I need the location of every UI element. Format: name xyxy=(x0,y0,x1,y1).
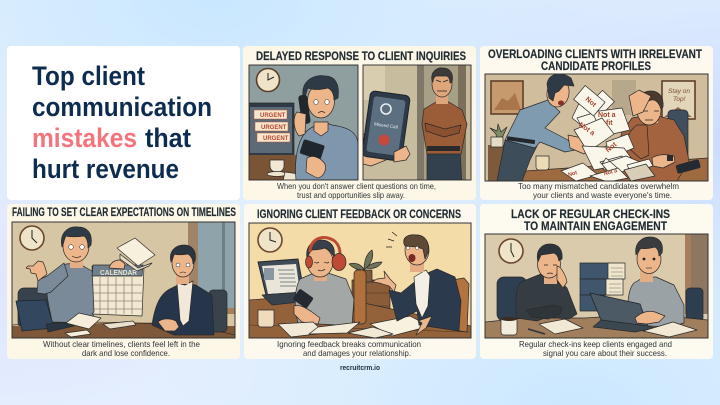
illustration: overwhelmed employee with urgent messages: URGENT xyxy=(261,125,287,131)
illustration: disengaged client and busy consultant xyxy=(485,234,708,338)
illustration: pile of not-a-fit resumes: fit xyxy=(606,120,613,127)
panel: ignoring feedback xyxy=(244,204,476,359)
title: mistakes xyxy=(32,123,137,153)
illustration: overwhelmed employee with urgent messages: URGENT xyxy=(263,136,289,142)
title: Top client xyxy=(32,61,145,91)
caption: signal you care about their success. xyxy=(543,348,667,358)
caption xyxy=(518,181,679,200)
illustration: employee with headphones ignoring client xyxy=(249,223,471,338)
panel: failing to set expectations xyxy=(7,204,240,359)
caption: When you don't answer client questions on time, xyxy=(277,181,436,191)
heading xyxy=(511,209,670,233)
heading: LACK OF REGULAR CHECK-INS xyxy=(511,209,670,221)
caption xyxy=(277,339,421,358)
panel: overloading clients xyxy=(480,46,713,200)
illustration: pile of not-a-fit resumes: Not a xyxy=(577,121,596,137)
illustration: pile of not-a-fit resumes: Not xyxy=(568,170,578,178)
title: hurt revenue xyxy=(32,154,179,184)
heading xyxy=(488,49,702,73)
title: communication xyxy=(32,92,212,122)
illustration: pile of not-a-fit resumes: Top! xyxy=(673,96,686,103)
caption xyxy=(277,181,436,200)
caption: Without clear timelines, clients feel left in the xyxy=(43,339,200,349)
illustration: pile of not-a-fit resumes: Not a xyxy=(603,168,619,177)
illustration: pile of not-a-fit resumes: Not xyxy=(584,96,598,109)
caption: dark and lose confidence. xyxy=(82,348,170,358)
illustration: pile of not-a-fit resumes: Not a xyxy=(598,112,616,119)
title xyxy=(32,61,212,184)
caption: Ignoring feedback breaks communication xyxy=(277,339,421,349)
caption: trust and opportunities slip away. xyxy=(297,190,405,200)
heading: DELAYED RESPONSE TO CLIENT INQUIRIES xyxy=(256,51,466,63)
caption xyxy=(43,339,200,358)
illustration: overwhelmed employee with urgent messages xyxy=(246,65,358,181)
heading: FAILING TO SET CLEAR EXPECTATIONS ON TIMELINES xyxy=(12,207,236,219)
panel: lack of check-ins xyxy=(480,204,713,359)
caption: and damages your relationship. xyxy=(303,348,411,358)
caption: Too many mismatched candidates overwhelm xyxy=(518,181,679,191)
caption: your clients and waste everyone's time. xyxy=(533,190,672,200)
panel: delayed response xyxy=(243,46,476,200)
heading: IGNORING CLIENT FEEDBACK OR CONCERNS xyxy=(257,209,461,221)
title: that xyxy=(145,123,191,153)
illustration: missed call and annoyed client xyxy=(362,65,471,185)
caption: Regular check-ins keep clients engaged and xyxy=(519,339,672,349)
illustration: pile of not-a-fit resumes: Stay on xyxy=(668,88,690,95)
illustration: overwhelmed employee with urgent messages: URGENT xyxy=(260,113,286,119)
caption xyxy=(519,339,672,358)
illustration: pile of not-a-fit resumes xyxy=(485,74,708,182)
panel: title card xyxy=(7,46,240,200)
illustration: missed call and annoyed client: Missed Call xyxy=(374,121,398,130)
illustration: calendar conversation xyxy=(12,222,235,338)
footer source: recruitcrm.io xyxy=(340,365,380,372)
heading: CANDIDATE PROFILES xyxy=(541,61,651,73)
illustration: calendar conversation: CALENDAR xyxy=(100,268,138,277)
illustration: pile of not-a-fit resumes: Not xyxy=(605,141,619,154)
heading: TO MAINTAIN ENGAGEMENT xyxy=(524,221,667,233)
